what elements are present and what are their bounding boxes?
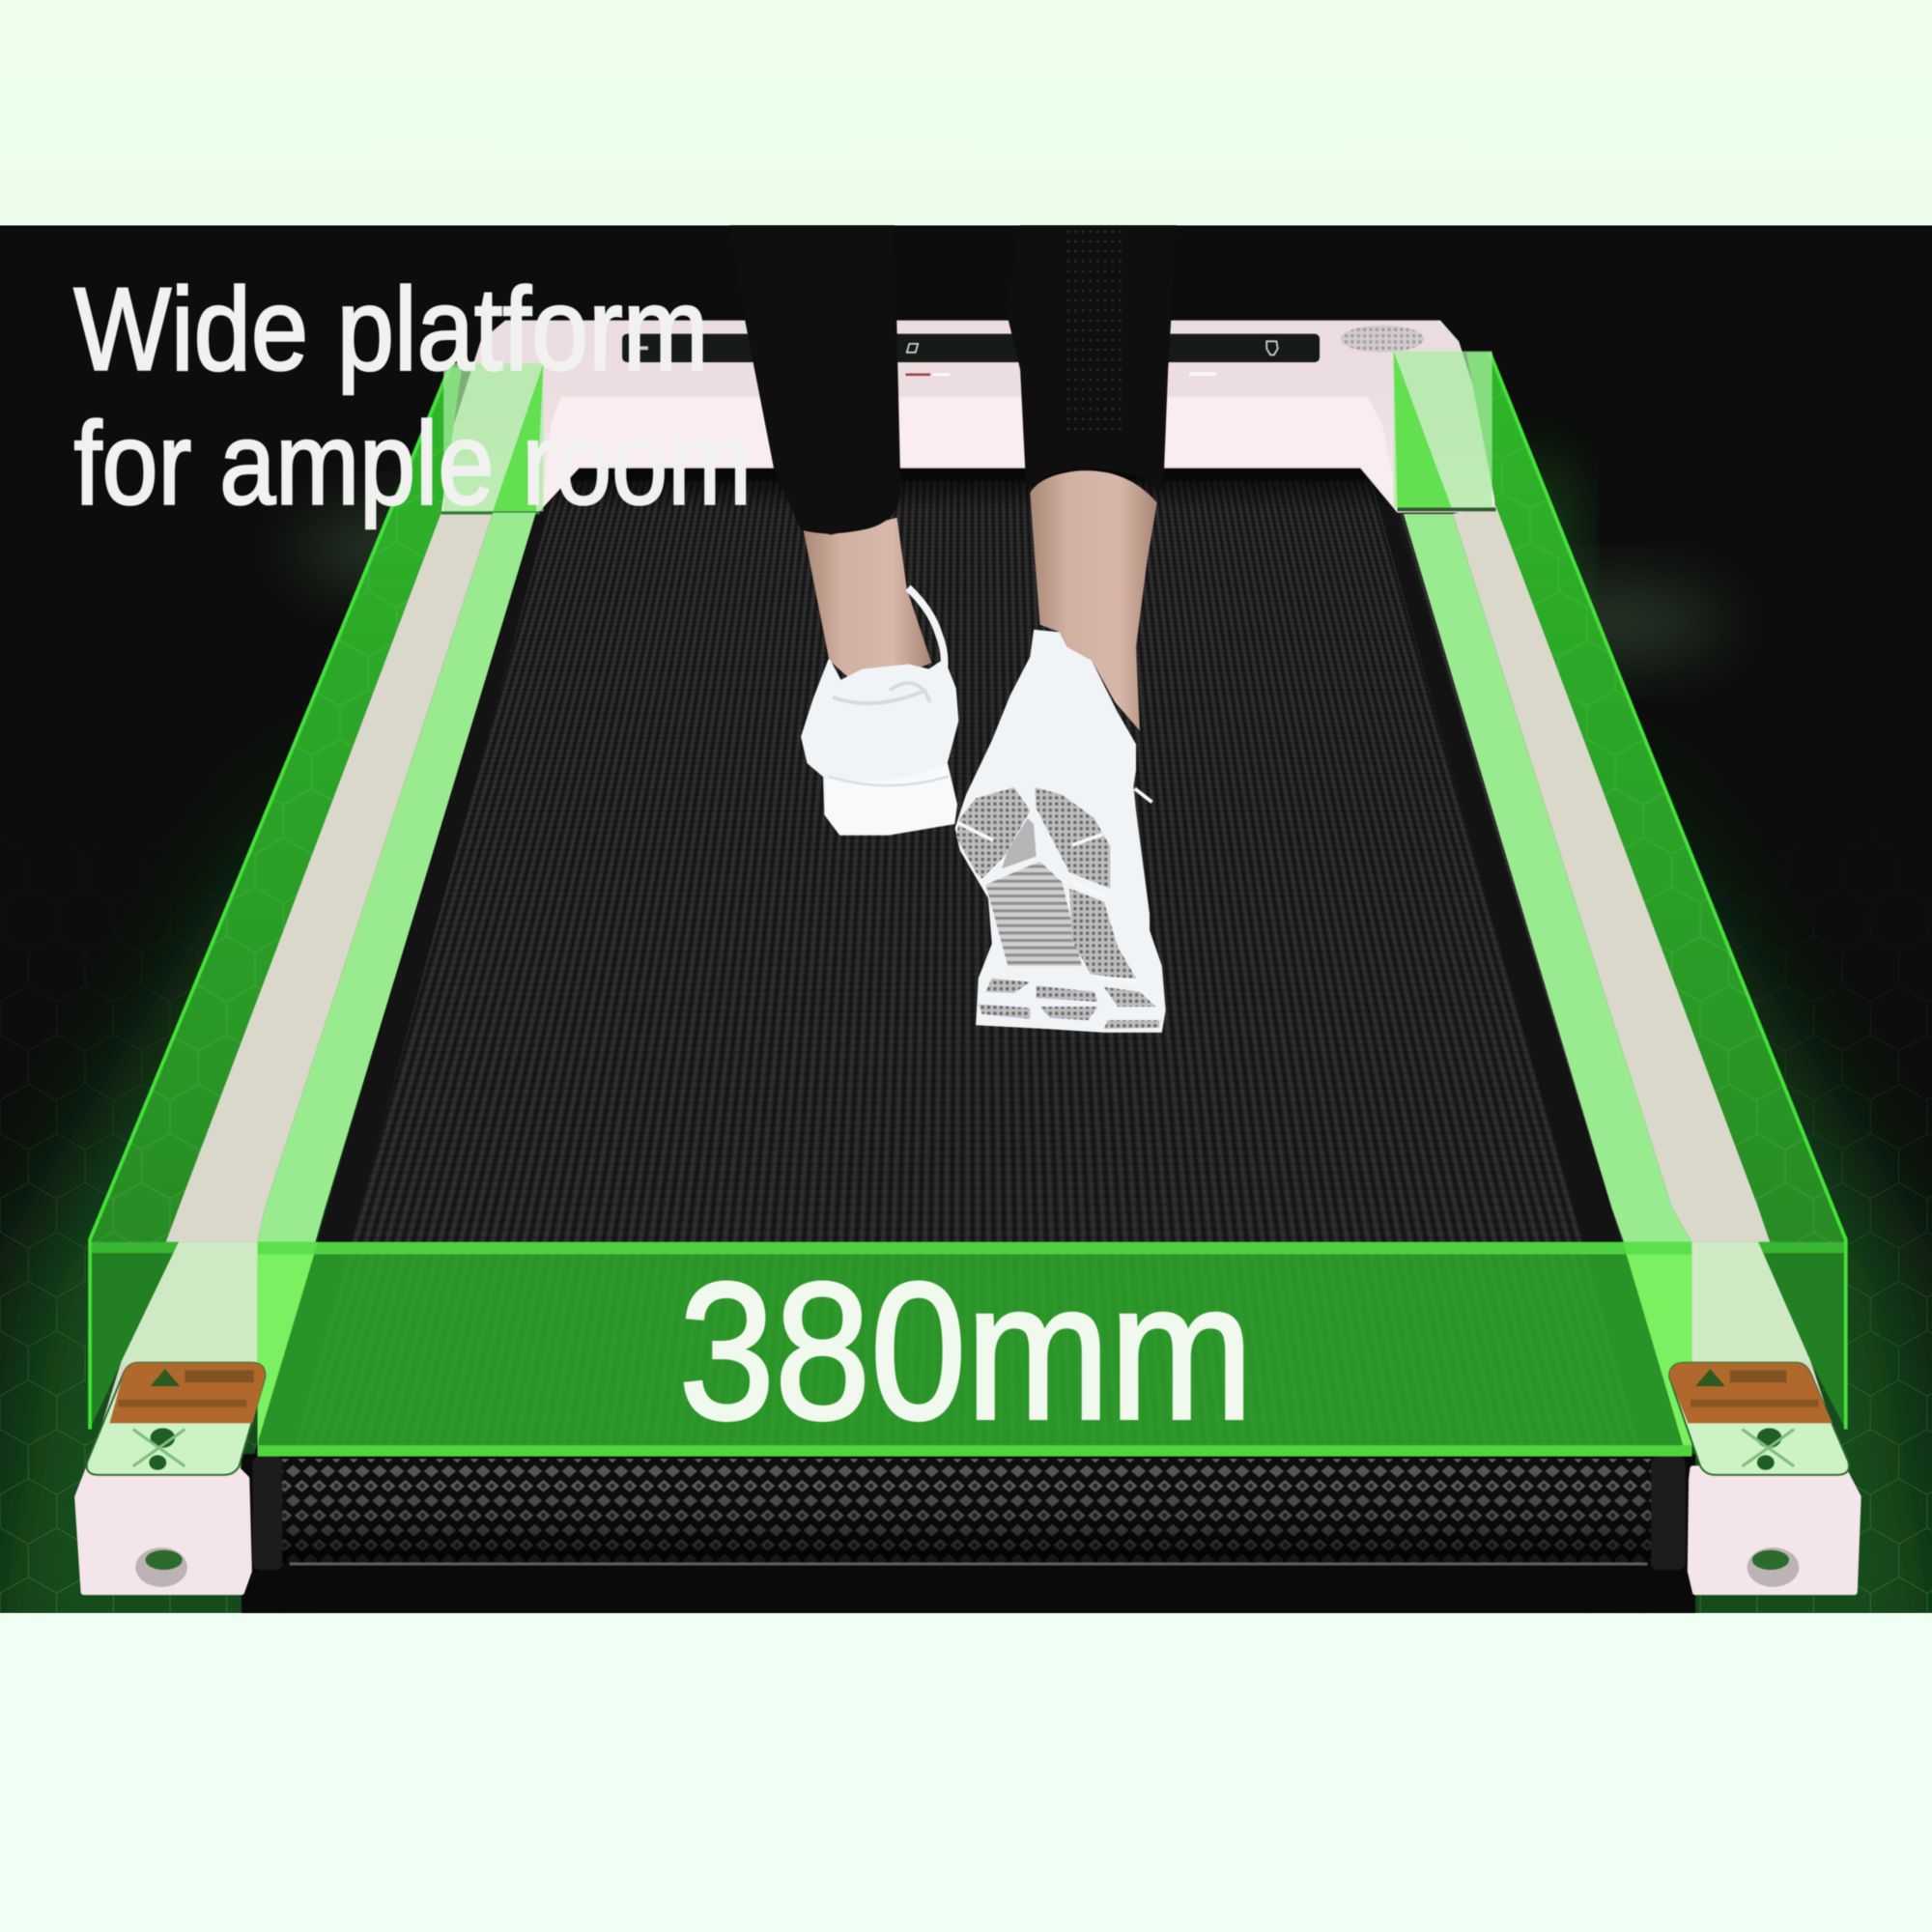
left front end block [77,1468,249,1592]
right leg [1006,225,1177,730]
right front end block [1690,1468,1858,1592]
front roller [242,1454,1695,1613]
left warning label [87,1363,265,1475]
right green measure wall [1466,353,1846,1430]
left leg [729,225,931,690]
right top green box [1394,352,1495,511]
dark background panel [0,225,1932,1614]
left top green box [441,363,543,515]
tinted rail fronts [121,1242,1811,1363]
right warning label [1669,1363,1849,1475]
left side rail [86,513,493,1475]
treadmill belt [254,481,1689,1454]
title: for ample room [74,398,752,529]
console shadow on belt [542,469,1392,510]
title: Wide platform [74,264,708,395]
title [74,264,752,529]
green width highlight [258,1242,1691,1457]
left green measure wall [90,367,462,1430]
right shoe with sole [955,630,1166,1033]
width measurement 380mm: 380mm [679,1242,1253,1460]
belt dark margins [254,480,1688,1457]
right side rail [1453,505,1848,1475]
left shoe [802,587,957,835]
pink console head [441,321,1495,513]
display strip [622,334,1320,376]
speaker grille [1341,326,1424,353]
left inner light green band [258,513,536,1439]
right inner light green band [1404,514,1704,1475]
